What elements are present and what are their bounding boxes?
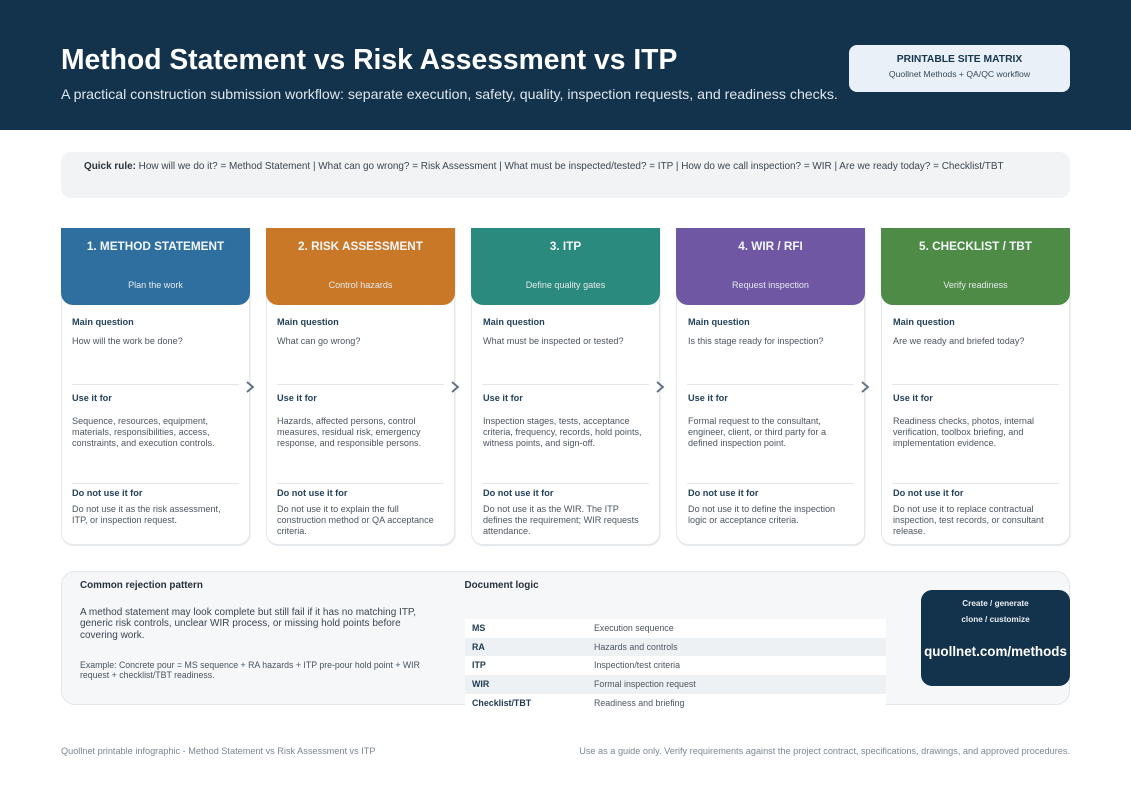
- card 2: risk assessment: Do not use it for: [277, 488, 347, 498]
- card 3: ITP: Main question: [483, 317, 545, 327]
- card 5: checklist / TBT: Use it for: [893, 393, 933, 403]
- text: Inspection/test criteria: [594, 660, 680, 670]
- card 2: risk assessment: [266, 228, 455, 545]
- card 5: checklist / TBT: implementation evidence.: [893, 438, 996, 448]
- common rejection pattern: request + checklist/TBT readiness.: [80, 670, 215, 680]
- card 2 header: Control hazards: [329, 280, 392, 290]
- card 1: method statement: [61, 228, 250, 545]
- card 5: checklist / TBT: [881, 228, 1070, 545]
- call to action box: Create / generate: [962, 599, 1029, 608]
- card 2: risk assessment: measures, residual risk, emergency: [277, 427, 421, 437]
- card 5: checklist / TBT: Do not use it to replace contractual: [893, 504, 1034, 514]
- card 3: ITP: attendance.: [483, 526, 531, 536]
- arrow 3 to 4: [656, 381, 664, 393]
- card 2: risk assessment: What can go wrong?: [277, 336, 360, 346]
- text: MS: [472, 623, 485, 633]
- card 3 header: 3. ITP: [550, 240, 581, 253]
- arrow 1 to 2: [246, 381, 254, 393]
- card 1: method statement: materials, responsibilities, access,: [72, 427, 209, 437]
- card 1: method statement: Main question: [72, 317, 134, 327]
- card 1 header: 1. METHOD STATEMENT: [87, 240, 224, 253]
- common rejection pattern: generic risk controls, unclear WIR process, or missing hold points before: [80, 618, 401, 629]
- text: Hazards and controls: [594, 642, 678, 652]
- card 2 header: 2. RISK ASSESSMENT: [298, 240, 423, 253]
- text: Checklist/TBT: [472, 698, 531, 708]
- card 4: WIR / RFI: logic or acceptance criteria.: [688, 515, 799, 525]
- card 2: risk assessment: construction method or QA acceptance: [277, 515, 434, 525]
- card 4: WIR / RFI: Formal request to the consultant,: [688, 416, 821, 426]
- quick rule bar: Quick rule: How will we do it? = Method Statement | What can go wrong? = Risk Assessment | What must be inspected/tested? = ITP | How do we call inspection? = WIR | Are we ready today? = Checklist/TBT: [84, 160, 1004, 172]
- card 1 header: [61, 228, 250, 305]
- card 3: ITP: Inspection stages, tests, acceptance: [483, 416, 630, 426]
- footer right: Use as a guide only. Verify requirements against the project contract, specifications, drawings, and approved procedures.: [579, 746, 1070, 756]
- card 2: risk assessment: criteria.: [277, 526, 307, 536]
- card 5: checklist / TBT: inspection, test records, or consultant: [893, 515, 1044, 525]
- card 2: risk assessment: response, and responsible persons.: [277, 438, 421, 448]
- card 4 header: 4. WIR / RFI: [738, 240, 803, 253]
- document logic heading: Document logic: [464, 580, 539, 590]
- card 5 header: [881, 228, 1070, 305]
- card 2: risk assessment: Use it for: [277, 393, 317, 403]
- card 3: ITP: What must be inspected or tested?: [483, 336, 624, 346]
- card 3: ITP: Use it for: [483, 393, 523, 403]
- card 3: ITP: witness points, and sign-off.: [483, 438, 595, 448]
- call to action box: [921, 590, 1070, 686]
- title: Method Statement vs Risk Assessment vs ITP: [61, 42, 677, 74]
- text: WIR: [472, 679, 489, 689]
- badge: [849, 45, 1070, 92]
- card 5 header: Verify readiness: [943, 280, 1008, 290]
- card 5: checklist / TBT: Do not use it for: [893, 488, 963, 498]
- bottom panel: [61, 571, 1070, 705]
- common rejection pattern: covering work.: [80, 630, 144, 641]
- card 1: method statement: Sequence, resources, equipment,: [72, 416, 208, 426]
- card 2: risk assessment: Do not use it to explain the full: [277, 504, 399, 514]
- quick rule bar: [61, 152, 1070, 198]
- card 1: method statement: ITP, or inspection request.: [72, 515, 177, 525]
- card 4: WIR / RFI: Main question: [688, 317, 750, 327]
- card 4: WIR / RFI: Do not use it to define the inspection: [688, 504, 835, 514]
- card 1: method statement: Do not use it for: [72, 488, 142, 498]
- text: Execution sequence: [594, 623, 674, 633]
- card 4: WIR / RFI: Do not use it for: [688, 488, 758, 498]
- footer left: Quollnet printable infographic - Method Statement vs Risk Assessment vs ITP: [61, 746, 376, 756]
- call to action box: clone / customize: [961, 614, 1030, 624]
- arrow 2 to 3: [452, 381, 460, 393]
- card 3: ITP: criteria, frequency, records, hold points,: [483, 427, 642, 437]
- text: Readiness and briefing: [594, 698, 684, 708]
- card 1: method statement: Do not use it as the risk assessment,: [72, 504, 221, 514]
- card 3 header: [471, 228, 660, 305]
- common rejection pattern: Example: Concrete pour = MS sequence + RA hazards + ITP pre-pour hold point + WIR: [80, 660, 420, 670]
- card 1: method statement: How will the work be done?: [72, 336, 183, 346]
- badge: PRINTABLE SITE MATRIX: [897, 54, 1022, 65]
- subtitle: A practical construction submission workflow: separate execution, safety, quality, inspection requests, and readiness checks.: [61, 86, 838, 102]
- card 3 header: Define quality gates: [526, 280, 605, 290]
- card 4: WIR / RFI: Use it for: [688, 393, 728, 403]
- arrow 4 to 5: [862, 381, 870, 393]
- card 3: ITP: defines the requirement; WIR requests: [483, 515, 639, 525]
- card 4: WIR / RFI: [676, 228, 865, 545]
- document logic table: [465, 619, 886, 708]
- card 3: ITP: [471, 228, 660, 545]
- common rejection pattern: A method statement may look complete but still fail if it has no matching ITP,: [80, 606, 416, 618]
- card 1: method statement: Use it for: [72, 393, 112, 403]
- card 4: WIR / RFI: Is this stage ready for inspection?: [688, 336, 823, 346]
- card 4: WIR / RFI: engineer, client, or third party for a: [688, 427, 826, 437]
- text: ITP: [472, 660, 486, 670]
- card 5: checklist / TBT: Are we ready and briefed today?: [893, 336, 1024, 346]
- common rejection pattern: [80, 580, 420, 680]
- card 3: ITP: Do not use it as the WIR. The ITP: [483, 504, 619, 514]
- card 1: method statement: constraints, and execution controls.: [72, 438, 215, 448]
- card 5: checklist / TBT: Readiness checks, photos, internal: [893, 416, 1034, 426]
- card 5 header: 5. CHECKLIST / TBT: [919, 240, 1032, 253]
- card 4 header: [676, 228, 865, 305]
- card 4: WIR / RFI: defined inspection point.: [688, 438, 786, 448]
- text: RA: [472, 642, 485, 652]
- card 5: checklist / TBT: Main question: [893, 317, 955, 327]
- card 4 header: Request inspection: [732, 280, 809, 290]
- badge: Quollnet Methods + QA/QC workflow: [889, 69, 1030, 79]
- card 2: risk assessment: Main question: [277, 317, 339, 327]
- card 3: ITP: Do not use it for: [483, 488, 553, 498]
- header band: [0, 0, 1131, 130]
- card 2 header: [266, 228, 455, 305]
- common rejection pattern: Common rejection pattern: [80, 580, 203, 590]
- card 5: checklist / TBT: verification, toolbox briefing, and: [893, 427, 1023, 437]
- call to action box: quollnet.com/methods: [924, 644, 1067, 659]
- text: Formal inspection request: [594, 679, 696, 689]
- card 1 header: Plan the work: [128, 280, 183, 290]
- card 5: checklist / TBT: release.: [893, 526, 925, 536]
- card 2: risk assessment: Hazards, affected persons, control: [277, 416, 415, 426]
